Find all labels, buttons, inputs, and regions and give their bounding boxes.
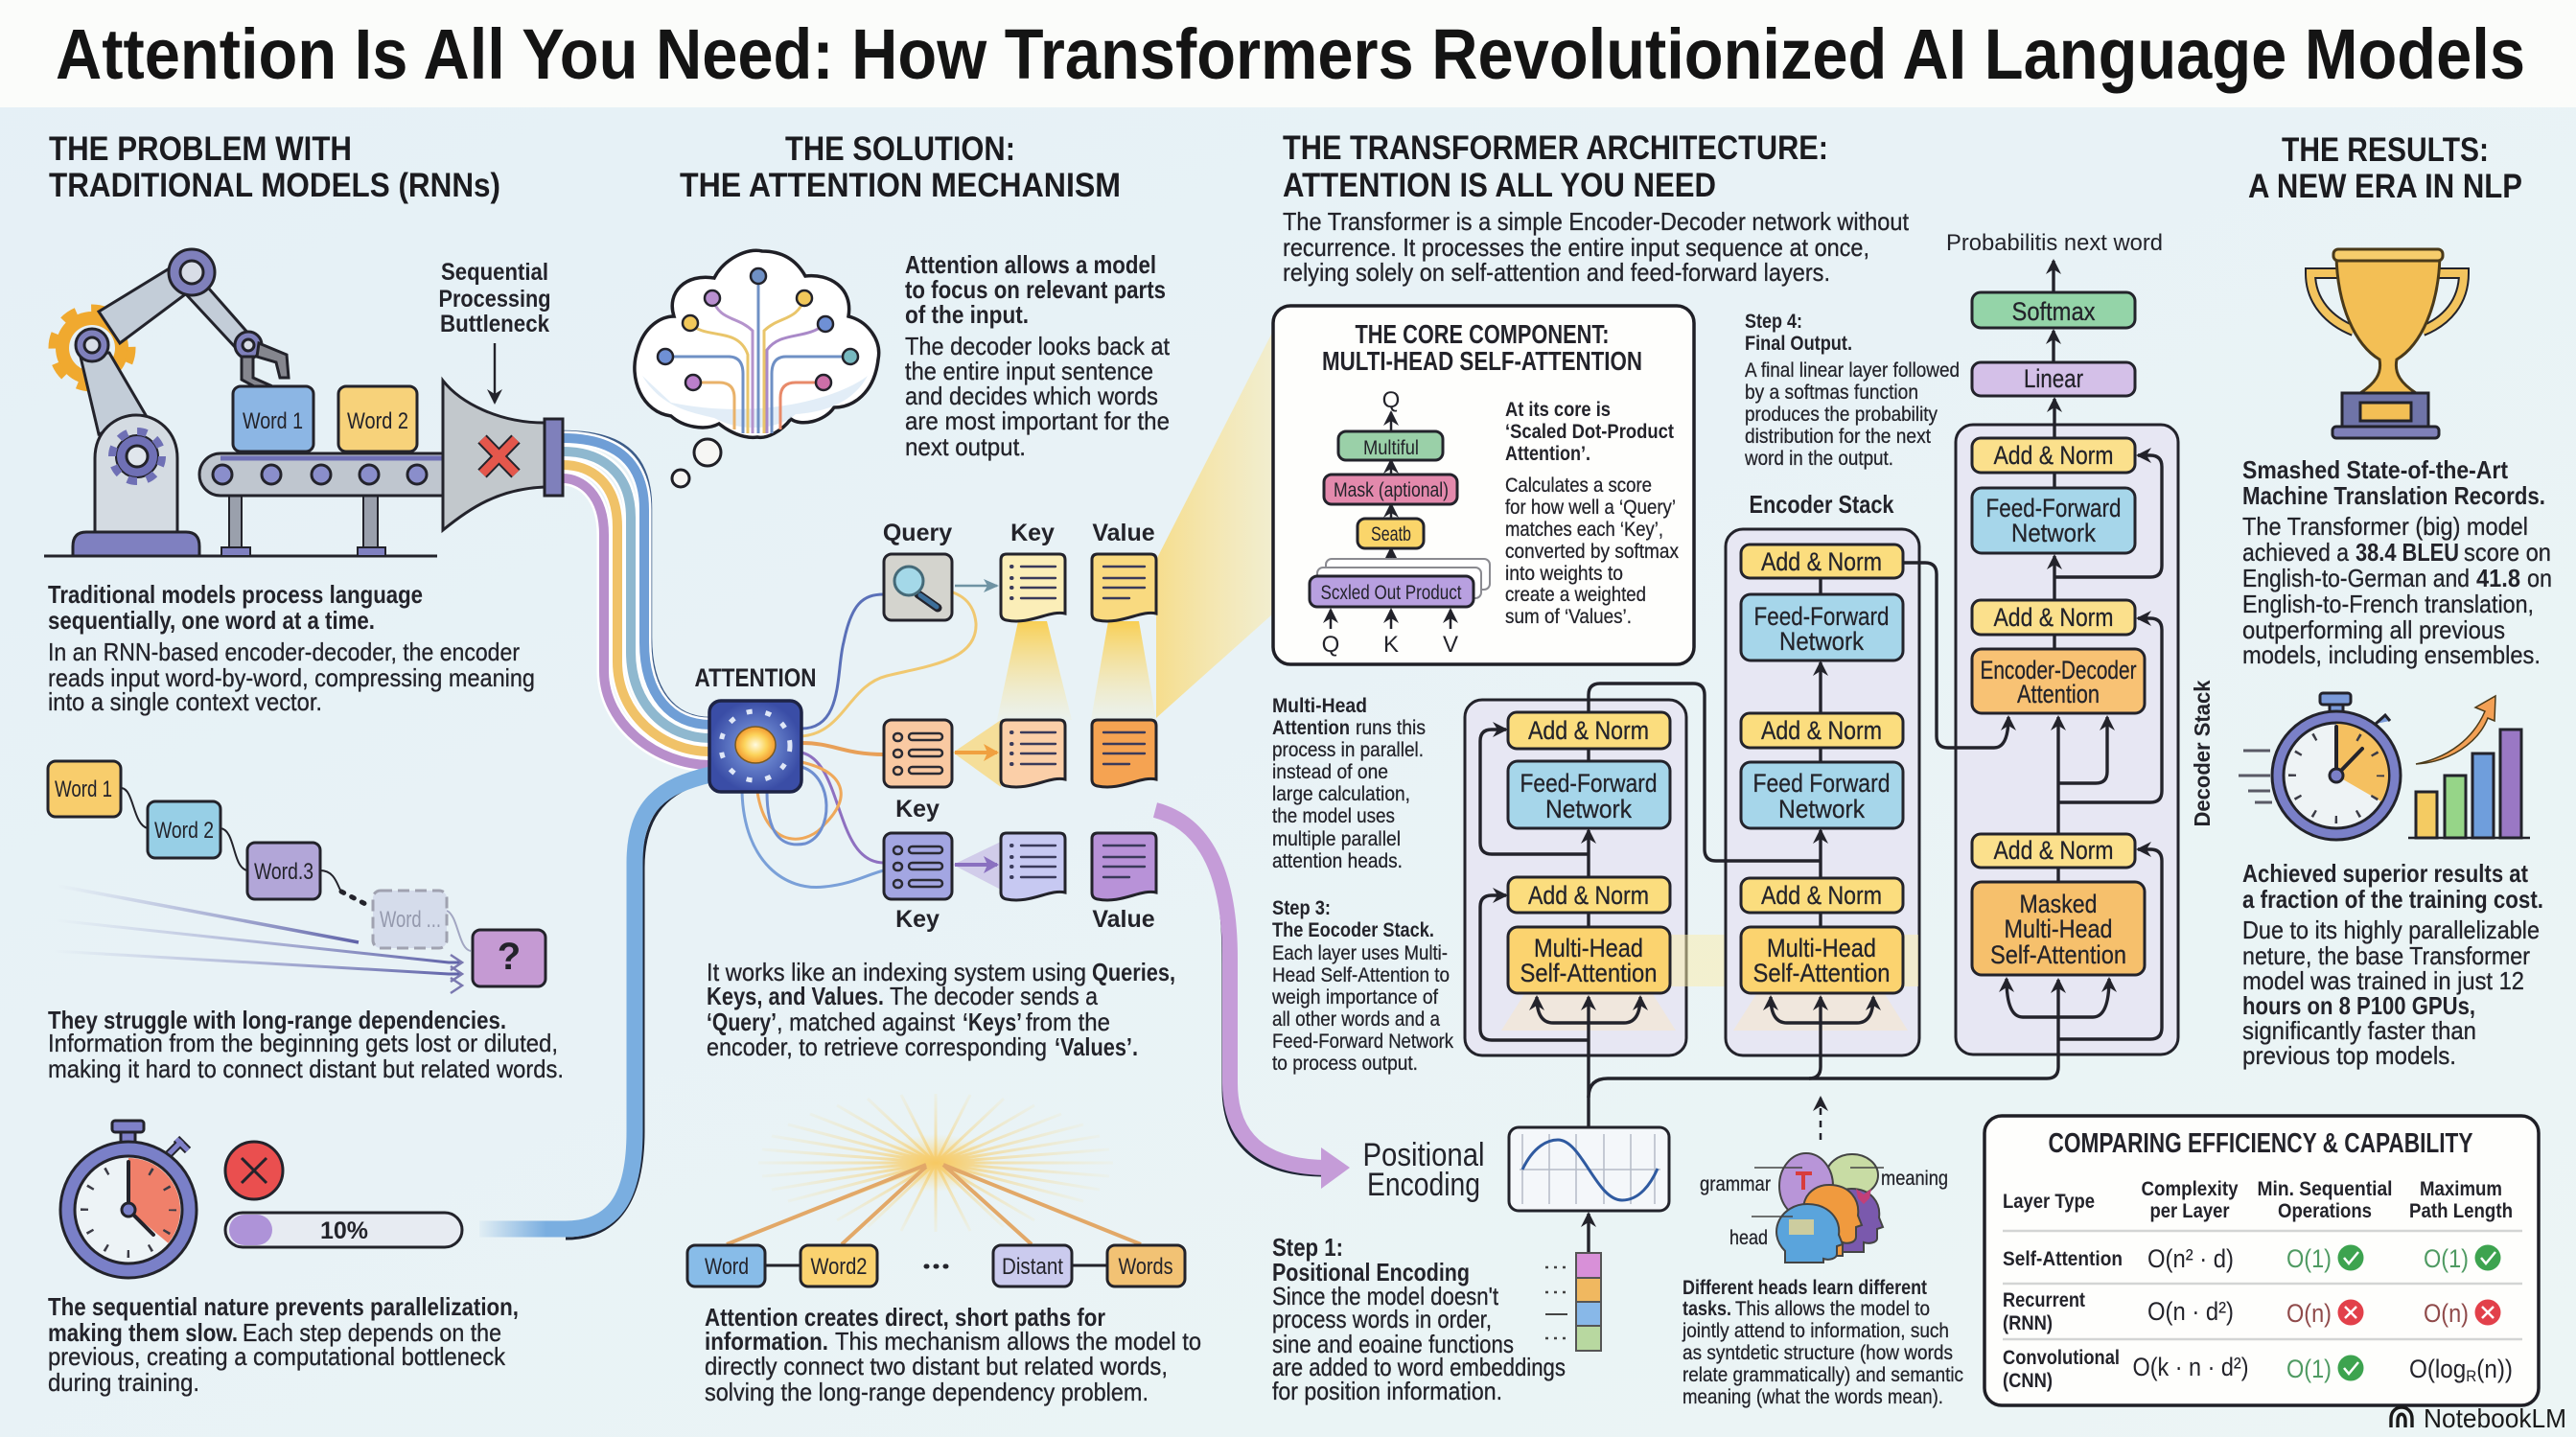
heading: problem: TRADITIONAL MODELS (RNNs): [49, 167, 500, 204]
panel text: sum of ‘Values’.: [1505, 605, 1632, 628]
heading: transformer architecture: ATTENTION IS ALL YOU NEED: [1283, 167, 1716, 204]
text: parallelization: Each step depends on the: [243, 1318, 501, 1347]
text: step 3 encoder stack: The Eocoder Stack.: [1272, 918, 1434, 941]
text: long-range dependencies: making it hard to connect distant but related words.: [48, 1055, 564, 1083]
text: traditional models: In an RNN-based encoder-decoder, the encoder: [48, 637, 520, 666]
decoder stack rotated label: Decoder Stack: [2190, 680, 2215, 826]
text: traditional models: into a single context vector.: [48, 687, 322, 716]
row: convolutional: Convolutional: [2003, 1346, 2120, 1369]
text: step 3 encoder stack: Head Self-Attention to: [1272, 963, 1450, 986]
text: records: 41.8: [2476, 564, 2520, 592]
text: attention allows: the entire input sentence: [905, 357, 1153, 385]
illustration: robot arm on conveyor belt: Word 1: [243, 408, 303, 434]
query to key arrow: [955, 585, 997, 587]
panel: core component multi-head self-attention: [1273, 306, 1694, 664]
scaled dot-product diagram: Seatb: [1371, 523, 1411, 545]
icon: fast stopwatch: [2239, 693, 2401, 840]
text: step 3 encoder stack: weigh importance of: [1271, 985, 1438, 1008]
progress bar 10%: 10%: [320, 1217, 368, 1244]
text: different heads: relate grammatically) and semantic: [1683, 1363, 1963, 1386]
text: training cost: significantly faster than: [2242, 1016, 2476, 1045]
text: long-range dependencies: [48, 1006, 564, 1083]
text: multi-head parallel: instead of one: [1272, 760, 1388, 783]
icon: red cross badge: [225, 1142, 283, 1199]
heading: results: THE RESULTS:: [2282, 131, 2489, 169]
panel: decoder stack: Multi-Head: [2004, 915, 2113, 943]
label: sequential processing bottleneck: Processing: [439, 286, 550, 313]
text: indexing system: ‘Keys’: [963, 1008, 1022, 1036]
text: attention allows: are most important for the: [905, 406, 1170, 435]
text: training cost: model was trained in just 12: [2242, 966, 2524, 995]
panel: encoder layer 2: Add & Norm: [1761, 547, 1882, 576]
table header: per Layer: [2149, 1199, 2230, 1222]
section: transformer architecture: [1271, 129, 2215, 1408]
text: records: English-to-German and: [2242, 564, 2470, 592]
text: traditional models: sequentially, one word at a time.: [48, 606, 375, 635]
panel: encoder layer 2: Network: [1778, 795, 1865, 823]
scaled dot-product diagram: V: [1443, 632, 1458, 658]
text: long-range dependencies: They struggle with long-range dependencies.: [48, 1006, 506, 1034]
diagram: long-range dependency chain: Word 2: [154, 818, 214, 844]
text: step 1 positional encoding: are added to word embeddings: [1272, 1353, 1566, 1381]
document: key row 2: [1001, 720, 1065, 787]
connector curves from attention core: [742, 592, 976, 888]
key row 2 arrow: [955, 751, 997, 754]
text: transformer intro: recurrence. It processes the entire input sequence at once,: [1283, 233, 1869, 262]
text: multi-head parallel: process in parallel.: [1272, 738, 1424, 761]
diagram: sunburst direct paths: Distant: [1002, 1254, 1063, 1280]
panel text: for how well a ‘Query’: [1505, 496, 1676, 519]
panel: encoder layer 2: Network: [1779, 627, 1864, 656]
label: sequential processing bottleneck: [439, 259, 550, 403]
positional encoding label: Positional: [1363, 1137, 1484, 1173]
panel text: ‘Scaled Dot-Product: [1505, 420, 1674, 443]
table title: COMPARING EFFICIENCY & CAPABILITY: [2048, 1128, 2473, 1159]
text: parallelization: [48, 1292, 519, 1397]
panel: encoder layer 2: Add & Norm: [1761, 716, 1882, 745]
text: different heads: as syntdetic structure (how words: [1683, 1341, 1953, 1364]
heading: solution: [680, 130, 1121, 204]
text: indexing system: encoder, to retrieve corresponding: [707, 1032, 1047, 1061]
diagram: sunburst direct paths: Word: [705, 1254, 749, 1280]
icon: thought cloud with circuit: [635, 250, 879, 487]
row: self-attention: Self-Attention: [2003, 1247, 2123, 1270]
table header: Min. Sequential: [2257, 1177, 2393, 1200]
head labels: grammar: [1700, 1172, 1771, 1195]
text: multi-head parallel: Multi-Head: [1272, 694, 1367, 717]
text: attention allows: The decoder looks back at: [905, 332, 1171, 360]
table header: Complexity: [2142, 1177, 2239, 1200]
panel: encoder layer 1: [1465, 700, 1741, 1055]
yellow attention beams: [953, 331, 1273, 890]
row: recurrent: O(n): [2424, 1299, 2469, 1328]
text: records: The Transformer (big) model: [2242, 512, 2528, 541]
panel heading: MULTI-HEAD SELF-ATTENTION: [1322, 346, 1642, 376]
text: indexing system: , matched against: [777, 1008, 956, 1036]
text: indexing system: ‘Values’.: [1055, 1032, 1138, 1061]
label: sequential processing bottleneck: Buttleneck: [440, 311, 549, 337]
text: attention allows: of the input.: [905, 300, 1029, 329]
panel: decoder stack: Attention: [2017, 680, 2100, 708]
text: records: English-to-French translation,: [2242, 590, 2534, 618]
text: direct short paths: Attention creates direct, short paths for: [705, 1303, 1105, 1332]
text: different heads: tasks.: [1683, 1297, 1731, 1320]
row: convolutional: O(k · n · d²): [2132, 1353, 2249, 1381]
text: indexing system: Keys, and Values.: [707, 982, 884, 1010]
chart: positional encoding sine wave: [1509, 1127, 1669, 1211]
text: parallelization: previous, creating a computational bottleneck: [48, 1342, 506, 1371]
chart: rising bars: [2408, 696, 2530, 838]
section: the problem with traditional models: [44, 130, 564, 1397]
linear box: Linear: [2024, 364, 2083, 393]
scaled dot-product diagram: Scxled Out Product: [1321, 582, 1462, 604]
text: different heads: meaning (what the words mean).: [1683, 1385, 1943, 1408]
text: training cost: previous top models.: [2242, 1041, 2456, 1070]
text: records: on: [2527, 564, 2552, 592]
row: self-attention: [2003, 1244, 2500, 1273]
attention core icon: ATTENTION: [694, 663, 817, 692]
text: indexing system: from the: [1026, 1008, 1110, 1036]
text: attention allows: Attention allows a model: [905, 250, 1156, 279]
text: step 4 final output: produces the probability: [1745, 403, 1938, 426]
document: value row 1: [1092, 554, 1156, 621]
text: step 4 final output: Final Output.: [1745, 332, 1852, 355]
panel: decoder stack: Encoder-Decoder: [1981, 656, 2136, 684]
text: step 4 final output: A final linear layer followed: [1745, 359, 1960, 382]
panel: decoder stack: Feed-Forward: [1986, 494, 2121, 522]
panel: encoder layer 1: Add & Norm: [1528, 716, 1649, 745]
panel: encoder layer 2: Feed-Forward: [1754, 602, 1889, 631]
encoder 2 connections: [1771, 563, 2008, 1023]
word embedding stack: [1545, 1214, 1601, 1351]
panel: encoder layer 1: Self-Attention: [1520, 959, 1657, 987]
panel text: into weights to: [1505, 562, 1623, 585]
panel: decoder stack: Add & Norm: [1994, 603, 2113, 632]
row: convolutional: O(1): [2286, 1355, 2332, 1383]
scaled dot-product diagram: K: [1383, 632, 1399, 658]
text: transformer intro: [1283, 207, 1910, 287]
list icon: key row 3: [884, 833, 952, 899]
encoder 1 connections: [1480, 684, 1821, 1040]
panel text: converted by softmax: [1505, 540, 1679, 563]
text: step 3 encoder stack: to process output.: [1272, 1052, 1418, 1075]
text: step 4 final output: [1744, 310, 1960, 470]
labels: query, key, value: [883, 520, 1155, 933]
diagram: long-range dependency chain: ?: [498, 936, 521, 978]
text: multi-head parallel: large calculation,: [1272, 782, 1410, 805]
panel heading: THE CORE COMPONENT:: [1356, 319, 1609, 349]
text: indexing system: It works like an indexing system using: [707, 958, 1086, 986]
text: training cost: hours on 8 P100 GPUs,: [2242, 991, 2475, 1020]
labels: query, key, value: Key: [895, 796, 940, 823]
panel: decoder stack: Add & Norm: [1994, 441, 2113, 470]
label: sequential processing bottleneck: Sequential: [441, 259, 548, 286]
text: attention allows: to focus on relevant parts: [905, 275, 1166, 304]
row: convolutional: (CNN): [2003, 1369, 2053, 1392]
heading: results: [2248, 131, 2522, 205]
text: step 4 final output: word in the output.: [1744, 447, 1893, 470]
text: direct short paths: directly connect two distant but related words,: [705, 1352, 1168, 1380]
text: training cost: Due to its highly parallelizable: [2242, 916, 2540, 944]
text: step 1 positional encoding: [1272, 1233, 1566, 1405]
text: indexing system: The decoder sends a: [890, 982, 1098, 1010]
heading: results: A NEW ERA IN NLP: [2248, 168, 2522, 205]
row: convolutional: [2003, 1346, 2513, 1392]
panel: encoder layer 1: Multi-Head: [1534, 934, 1643, 962]
text: step 1 positional encoding: Positional Encoding: [1272, 1258, 1470, 1286]
text: different heads: [1682, 1276, 1963, 1408]
row: convolutional: O(log: [2409, 1355, 2472, 1383]
table header: Path Length: [2409, 1199, 2513, 1222]
scaled dot-product diagram: Multiful: [1363, 437, 1419, 459]
scaled dot-product diagram: Mask (aptional): [1334, 479, 1449, 501]
document: value row 2: [1092, 720, 1156, 787]
text: attention allows: [905, 250, 1171, 461]
labels: query, key, value: Value: [1092, 520, 1155, 546]
panel: decoder stack: Self-Attention: [1990, 940, 2126, 969]
text: different heads: Different heads learn different: [1683, 1276, 1927, 1299]
panel: decoder stack: Network: [2011, 519, 2096, 547]
text: step 3 encoder stack: Each layer uses Multi-: [1272, 941, 1448, 964]
diagram: long-range dependency chain: [48, 761, 545, 993]
row: recurrent: O(n · d²): [2147, 1297, 2234, 1326]
text: step 4 final output: by a softmas function: [1745, 381, 1918, 404]
head labels: head: [1729, 1226, 1768, 1249]
text: multi-head parallel: the model uses: [1272, 804, 1395, 827]
heading: solution: THE SOLUTION:: [785, 130, 1015, 168]
input bus: [1589, 980, 2058, 1128]
panel: encoder layer 1: Feed-Forward: [1520, 769, 1657, 798]
diagram: long-range dependency chain: Word ...: [380, 907, 441, 933]
rainbow information pipe: [563, 431, 710, 765]
text: attention allows: and decides which words: [905, 382, 1158, 410]
text: records: 38.4 BLEU: [2356, 538, 2459, 567]
text: step 1 positional encoding: Since the model doesn't: [1272, 1282, 1499, 1310]
title band: [0, 0, 2576, 107]
icon: bottleneck funnel with red cross: [443, 381, 563, 530]
row: recurrent: Recurrent: [2003, 1288, 2085, 1311]
icon: trophy: [2310, 249, 2464, 438]
heading: problem: THE PROBLEM WITH: [49, 130, 352, 168]
text: direct short paths: This mechanism allows the model to: [835, 1327, 1201, 1356]
scaled dot-product diagram: [1310, 387, 1490, 658]
icon: query magnifier: [884, 554, 952, 620]
linear box: [1972, 362, 2135, 396]
panel: comparison table: [1984, 1116, 2539, 1405]
text: transformer intro: The Transformer is a simple Encoder-Decoder network without: [1283, 207, 1910, 236]
table header: Maximum: [2420, 1177, 2502, 1200]
labels: query, key, value: Query: [883, 520, 952, 546]
text: direct short paths: information.: [705, 1327, 828, 1356]
table header: Operations: [2278, 1199, 2372, 1222]
panel: decoder stack: Add & Norm: [1994, 836, 2113, 865]
text: step 3 encoder stack: [1271, 896, 1453, 1075]
icon: slow stopwatch: [60, 1121, 197, 1278]
diagram: sunburst direct paths: Word2: [811, 1254, 867, 1280]
positional encoding label: [1363, 1137, 1484, 1203]
panel: decoder stack: Masked: [2019, 890, 2098, 918]
diagram: sunburst direct paths: Words: [1118, 1254, 1173, 1280]
section: the results: [2239, 131, 2552, 1070]
illustration: robot arm on conveyor belt: [44, 249, 451, 556]
heading: solution: THE ATTENTION MECHANISM: [680, 167, 1121, 204]
text: multi-head parallel: [1272, 694, 1426, 872]
list icon: key row 2: [884, 720, 952, 787]
panel heading: [1322, 319, 1642, 376]
softmax box: Softmax: [2011, 297, 2096, 326]
text: records: outperforming all previous: [2242, 615, 2505, 644]
text: training cost: Achieved superior results at: [2242, 859, 2528, 888]
labels: query, key, value: Value: [1092, 906, 1155, 933]
decoder connections: [2007, 261, 2162, 1039]
text: indexing system: ‘Query’: [707, 1008, 777, 1036]
text: direct short paths: [705, 1303, 1201, 1406]
text: different heads: This allows the model to: [1735, 1297, 1930, 1320]
panel: encoder layer 2: Feed Forward: [1752, 769, 1891, 798]
labels: query, key, value: Key: [895, 906, 940, 933]
row: recurrent: O(n): [2286, 1299, 2332, 1328]
scaled dot-product diagram: Q: [1322, 632, 1339, 658]
text: parallelization: The sequential nature prevents parallelization,: [48, 1292, 519, 1321]
text: records: models, including ensembles.: [2242, 640, 2541, 669]
conveyor: [229, 496, 242, 547]
text: records: achieved a: [2242, 538, 2349, 567]
text: training cost: neture, the base Transformer: [2242, 941, 2530, 970]
text: multi-head parallel: attention heads.: [1272, 849, 1403, 872]
softmax box: [1972, 292, 2135, 328]
row: self-attention: O(1): [2286, 1244, 2332, 1273]
table header: [2003, 1177, 2513, 1222]
text: step 3 encoder stack: all other words and a: [1272, 1008, 1440, 1031]
row: recurrent: (RNN): [2003, 1311, 2053, 1334]
text: traditional models: reads input word-by-word, compressing meaning: [48, 663, 535, 692]
panel text: At its core is: [1505, 398, 1611, 421]
text: training cost: [2242, 859, 2543, 1070]
text: attention allows: next output.: [905, 432, 1026, 461]
scaled dot-product diagram: Q: [1382, 387, 1400, 413]
row: convolutional: R: [2466, 1367, 2476, 1385]
attention core icon: [694, 663, 817, 792]
text: traditional models: [48, 580, 535, 716]
text: indexing system: Queries,: [1092, 958, 1175, 986]
blue return pipe: [479, 775, 710, 1239]
text: step 4 final output: Step 4:: [1745, 310, 1802, 333]
document: value row 3: [1092, 833, 1156, 900]
table header: Layer Type: [2003, 1190, 2095, 1213]
icon: multiple heads: [1700, 1153, 1948, 1263]
panel: decoder stack: [1956, 425, 2178, 1055]
panel: encoder layer 2: Multi-Head: [1767, 934, 1876, 962]
text: step 1 positional encoding: sine and eoaine functions: [1272, 1330, 1514, 1358]
illustration: robot arm on conveyor belt: Word 2: [347, 408, 408, 434]
key row 3 arrow: [955, 863, 997, 867]
architecture wiring: [1480, 261, 2162, 1128]
text: step 1 positional encoding: Step 1:: [1272, 1233, 1343, 1262]
diagram: long-range dependency chain: Word.3: [254, 859, 313, 885]
row: convolutional: (n)): [2476, 1355, 2513, 1383]
panel: encoder layer 2: Self-Attention: [1752, 959, 1891, 987]
text: step 4 final output: distribution for the next: [1745, 425, 1931, 448]
text: traditional models: Traditional models process language: [48, 580, 423, 609]
head labels: meaning: [1881, 1167, 1948, 1190]
progress bar 10%: [225, 1213, 462, 1247]
text: multi-head parallel: runs this: [1356, 716, 1426, 739]
text: multi-head parallel: Attention: [1272, 716, 1350, 739]
text: step 3 encoder stack: Feed-Forward Network: [1272, 1030, 1453, 1053]
text: parallelization: during training.: [48, 1368, 199, 1397]
row: recurrent: [2003, 1288, 2500, 1334]
section: the solution, attention mechanism: [635, 130, 1350, 1406]
text: records: score on: [2464, 538, 2551, 567]
text: different heads: jointly attend to information, such: [1682, 1319, 1949, 1342]
panel text: create a weighted: [1505, 583, 1646, 606]
dashed arrow: [1820, 1098, 1822, 1140]
panel: encoder layer 1: Add & Norm: [1528, 881, 1649, 910]
heading: transformer architecture: THE TRANSFORMER ARCHITECTURE:: [1283, 129, 1828, 167]
heading: problem: [49, 130, 500, 204]
text: direct short paths: solving the long-range dependency problem.: [705, 1378, 1149, 1406]
text: parallelization: making them slow.: [48, 1318, 238, 1347]
diagram: sunburst direct paths: [687, 1094, 1185, 1286]
text: multi-head parallel: multiple parallel: [1272, 827, 1401, 850]
text: step 1 positional encoding: process words in order,: [1272, 1305, 1492, 1333]
text: transformer intro: relying solely on self-attention and feed-forward layers.: [1283, 258, 1830, 287]
panel: encoder layer 2: Add & Norm: [1761, 881, 1882, 910]
row: self-attention: O(1): [2424, 1244, 2469, 1273]
document: key row 1: [1001, 554, 1065, 621]
panel text: [1505, 398, 1679, 628]
row: self-attention: O(n² · d): [2147, 1244, 2234, 1273]
heading: transformer architecture: [1283, 129, 1828, 204]
encoder stack heading: Encoder Stack: [1749, 490, 1894, 519]
text: records: Smashed State-of-the-Art: [2242, 455, 2508, 484]
text: step 1 positional encoding: for position information.: [1272, 1377, 1502, 1405]
purple arrow to positional encoding: [1155, 810, 1350, 1189]
NotebookLM logo and label: NotebookLM: [2424, 1403, 2566, 1433]
head labels: [1700, 1167, 1948, 1249]
text: indexing system: [707, 958, 1175, 1061]
output heading: probabilities next word: Probabilitis next word: [1946, 230, 2163, 256]
word blocks: [233, 386, 313, 452]
panel text: matches each ‘Key’,: [1505, 518, 1663, 541]
panel text: Calculates a score: [1505, 474, 1652, 497]
panel: encoder layer 1: Network: [1545, 795, 1632, 823]
panel: encoder layer 2: [1726, 529, 1919, 1055]
diagram: long-range dependency chain: Word 1: [55, 776, 112, 802]
text: records: [2242, 455, 2552, 669]
text: step 3 encoder stack: Step 3:: [1272, 896, 1331, 919]
text: long-range dependencies: Information from the beginning gets lost or diluted,: [48, 1029, 558, 1057]
positional encoding label: Encoding: [1367, 1167, 1480, 1203]
panel text: Attention’.: [1505, 442, 1590, 465]
labels: query, key, value: Key: [1010, 520, 1055, 546]
document: key row 3: [1001, 833, 1065, 900]
